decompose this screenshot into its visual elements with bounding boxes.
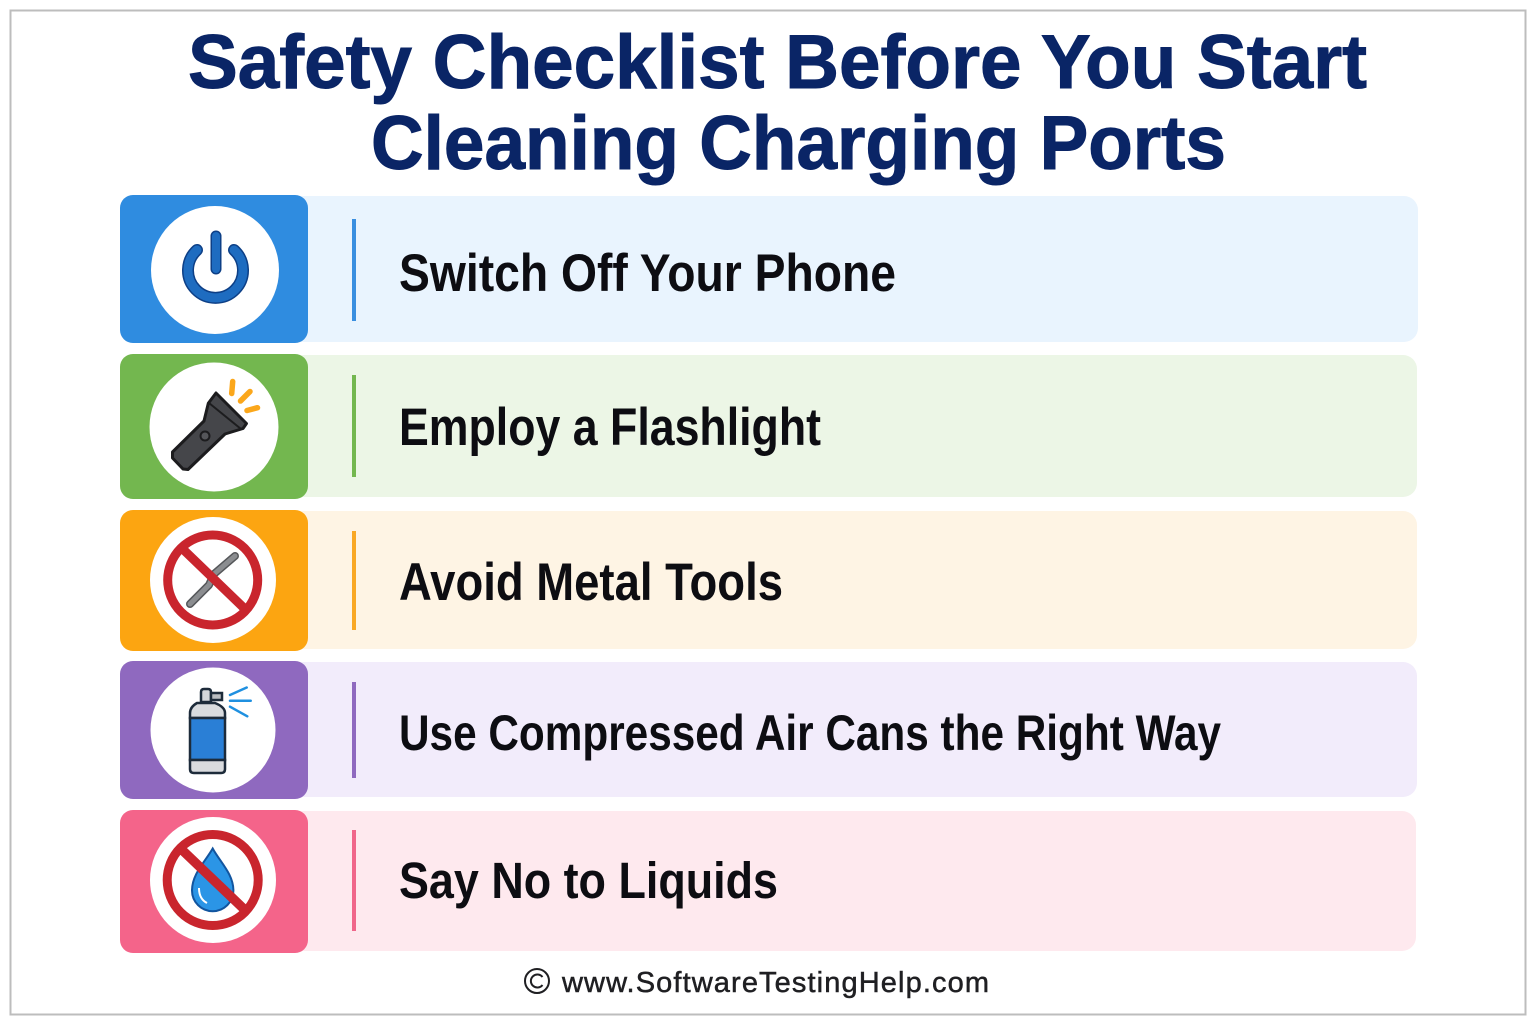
panel: no liquids	[120, 810, 1416, 953]
title	[188, 20, 1367, 186]
label: metal tools: Avoid Metal Tools	[399, 553, 783, 612]
label: no liquids: Say No to Liquids	[399, 852, 778, 909]
label: flashlight: Employ a Flashlight	[399, 398, 821, 457]
footer: website credit: www.SoftwareTestingHelp.com	[561, 967, 989, 999]
label: switch off: Switch Off Your Phone	[399, 244, 896, 303]
panel: avoid metal tools	[120, 510, 1417, 651]
title: Safety Checklist Before You Start	[188, 20, 1367, 105]
label: compressed air: Use Compressed Air Cans the Right Way	[399, 705, 1221, 761]
panel: compressed air	[120, 661, 1417, 799]
icon: no metal tools	[168, 535, 258, 625]
title: Cleaning Charging Ports	[371, 101, 1226, 186]
icon: power button	[188, 236, 243, 298]
panel: employ a flashlight	[120, 354, 1417, 499]
icon: flashlight	[172, 382, 258, 470]
panel: switch off your phone	[120, 195, 1418, 343]
icon: air can	[190, 688, 251, 773]
icon: no liquids	[167, 834, 258, 926]
